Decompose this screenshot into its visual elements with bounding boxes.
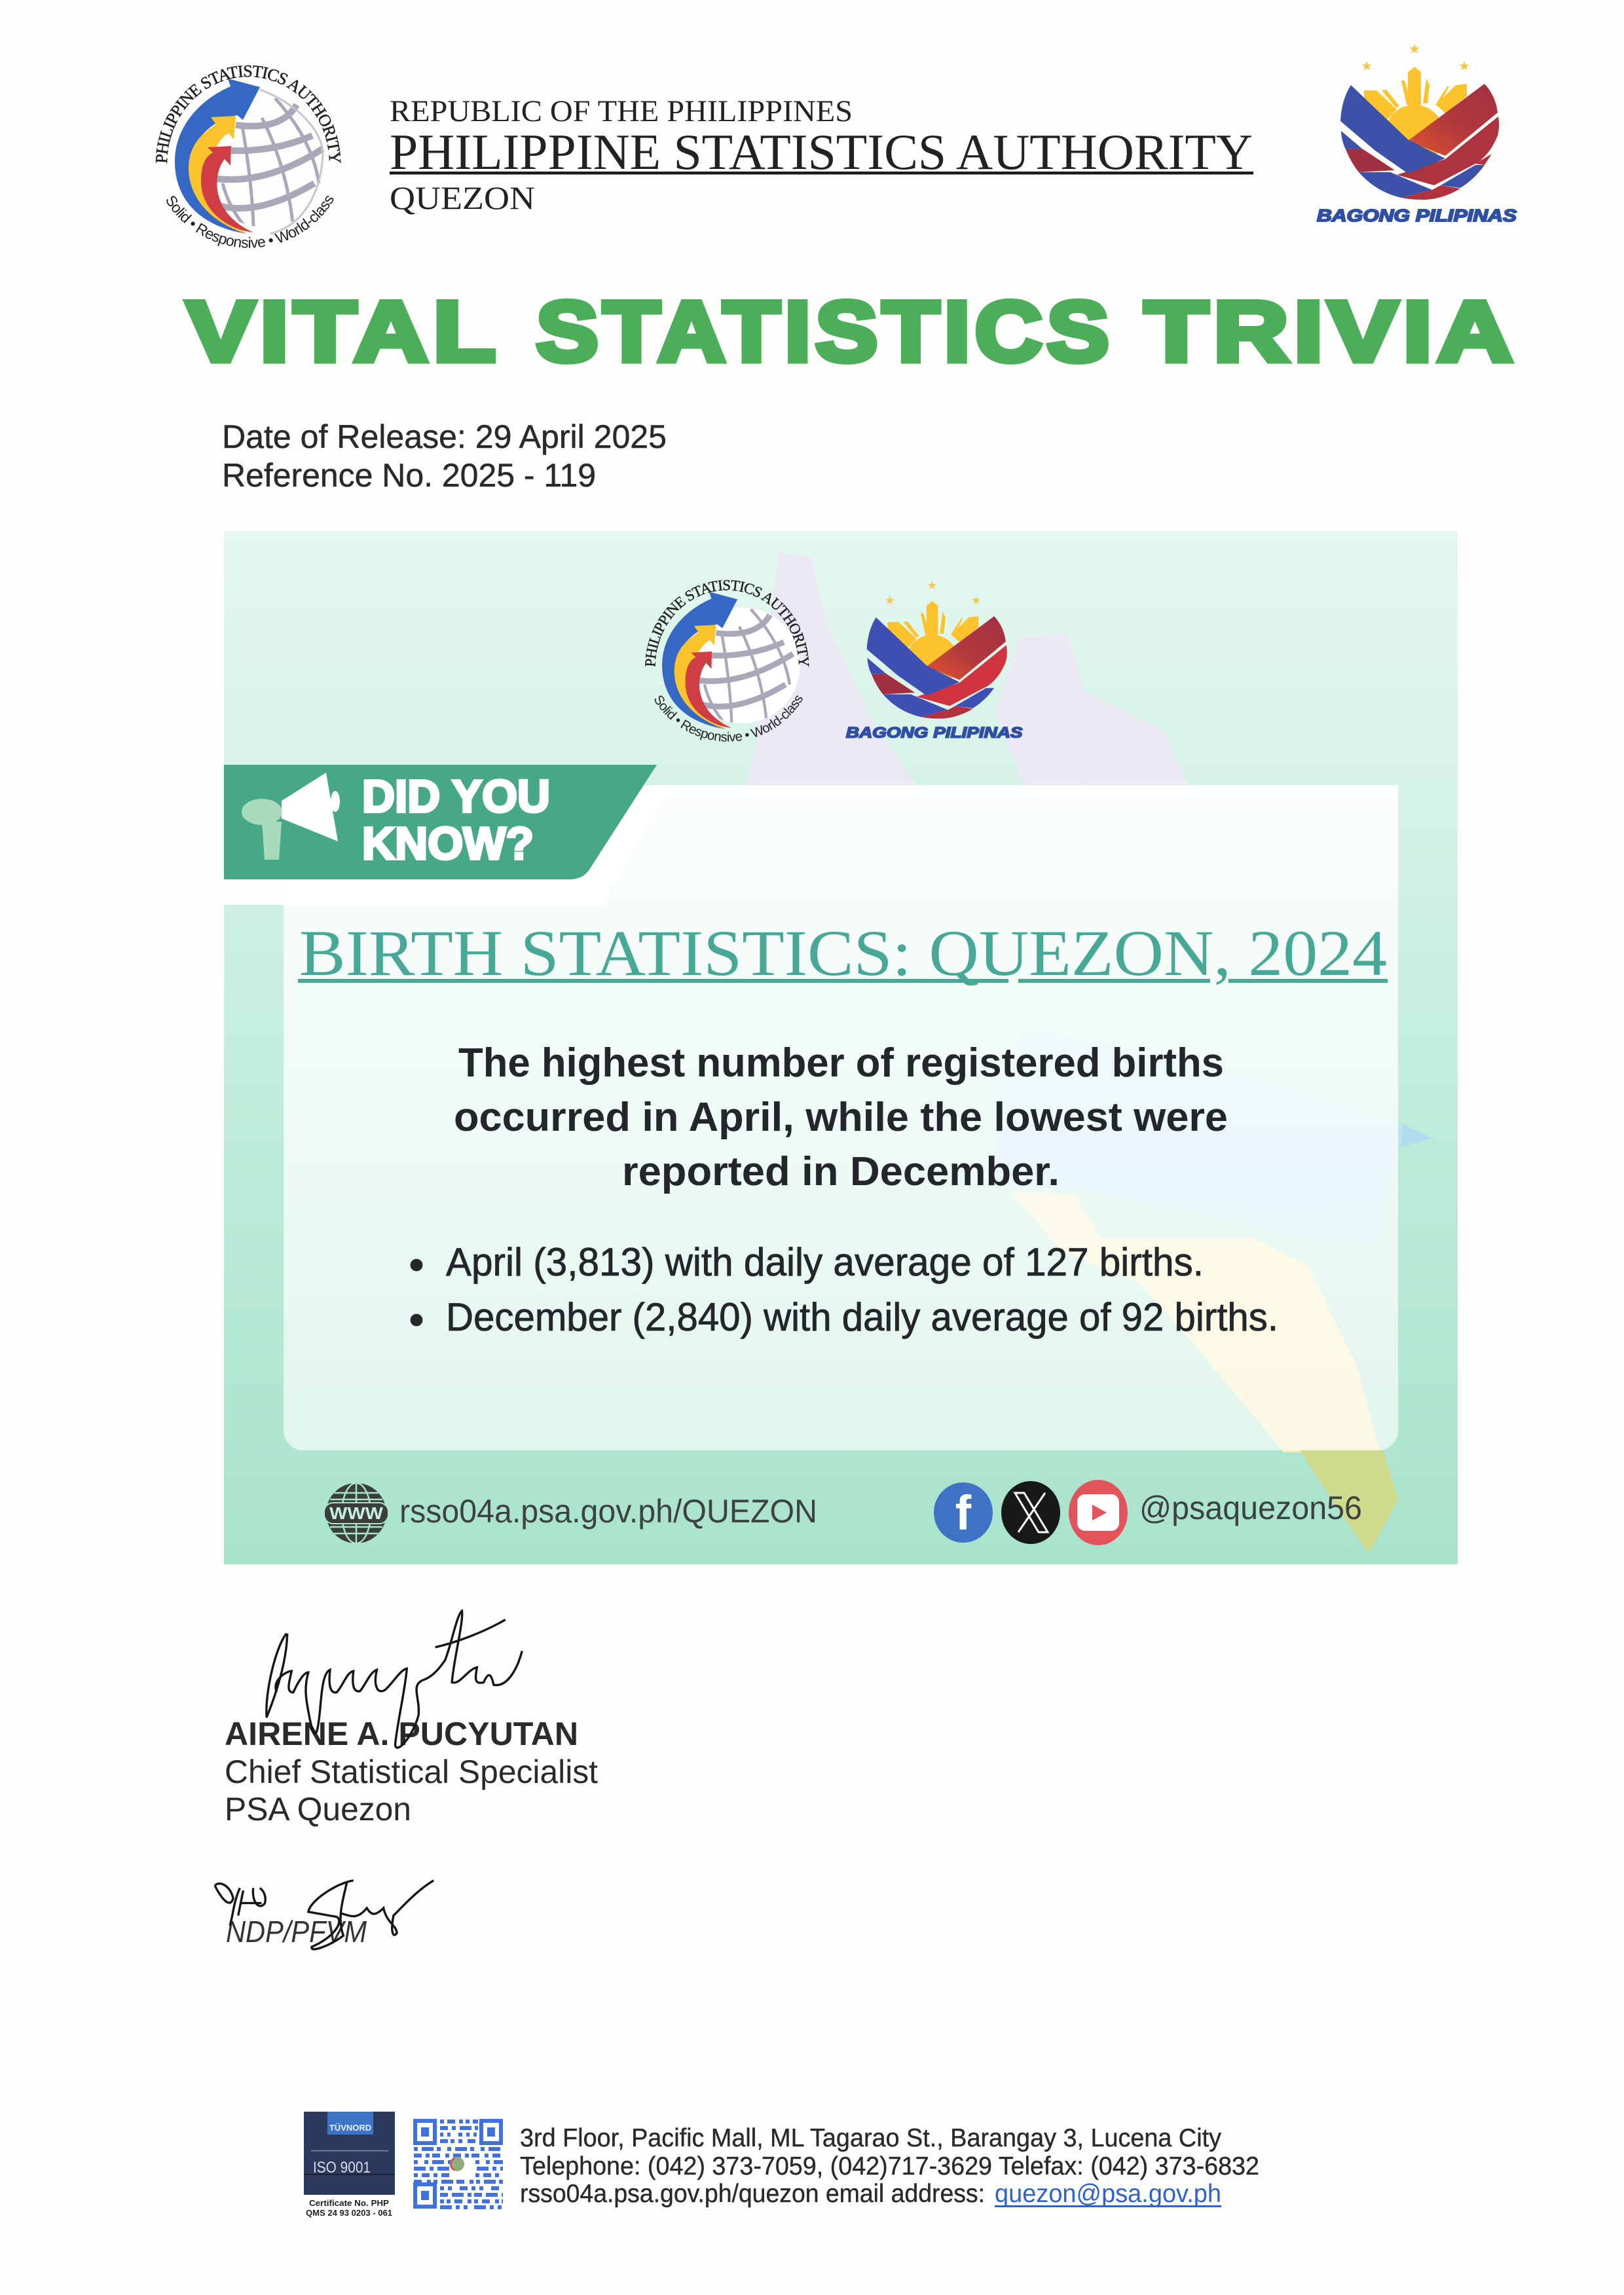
banner: did you know <box>224 765 657 879</box>
icon: facebook: f <box>955 1486 972 1540</box>
text block: key finding <box>454 1040 1228 1194</box>
badge: ISO 9001 certification <box>304 2112 395 2218</box>
icon: youtube <box>1069 1480 1128 1545</box>
website link with globe icon <box>324 1483 817 1543</box>
signatory block: AIRENE A. PUCYUTAN <box>225 1716 578 1752</box>
text block: key finding: The highest number of registered births <box>458 1040 1224 1086</box>
banner: did you know: DID YOU <box>362 771 550 822</box>
icon: www globe: WWW <box>329 1503 384 1523</box>
office contact details: quezon@psa.gov.ph <box>995 2180 1221 2208</box>
release date and reference number: Reference No. 2025 - 119 <box>222 457 596 494</box>
logo: Philippine Statistics Authority seal: Solid • Responsive • World-class <box>166 196 334 248</box>
map southern tip <box>1300 1450 1398 1553</box>
signatory block <box>225 1716 598 1827</box>
title: Vital Statistics Trivia: STATISTICS <box>536 284 1114 379</box>
title: Vital Statistics Trivia: TRIVIA <box>1145 284 1518 379</box>
QR code <box>414 2121 503 2207</box>
logo: PSA seal small: PHILIPPINE STATISTICS AUTHORITY <box>645 580 809 667</box>
initials: NDP/PFVM: NDP/PFVM <box>226 1915 367 1949</box>
bullet list: monthly figures: April (3,813) with daily average of 127 births. <box>446 1240 1204 1284</box>
website link with globe icon: rsso04a.psa.gov.ph/QUEZON <box>399 1493 817 1530</box>
signature: initials <box>215 1881 434 1949</box>
logo: Bagong Pilipinas small <box>846 581 1023 741</box>
logo: Bagong Pilipinas: BAGONG PILIPINAS <box>1317 206 1517 225</box>
office contact details <box>520 2124 1259 2208</box>
band behind banner <box>224 785 671 905</box>
icon: megaphone <box>242 773 340 860</box>
bullet list: monthly figures: December (2,840) with daily average of 92 births. <box>446 1295 1278 1339</box>
signature: chief statistical specialist <box>267 1611 522 1748</box>
office contact details: 3rd Floor, Pacific Mall, ML Tagarao St., Barangay 3, Lucena City <box>520 2124 1221 2152</box>
badge: ISO 9001 certification: TÜVNORD <box>329 2123 371 2133</box>
badge: ISO 9001 certification: Certificate No. PHP <box>309 2198 389 2208</box>
title: Vital Statistics Trivia <box>187 284 1518 379</box>
social media icons and handle: @psaquezon56 <box>1139 1490 1362 1526</box>
text block: key finding: occurred in April, while the lowest were <box>454 1095 1228 1140</box>
header text block <box>390 94 1253 216</box>
title: Vital Statistics Trivia: VITAL <box>187 284 501 379</box>
office contact details: rsso04a.psa.gov.ph/quezon email address: <box>520 2180 985 2208</box>
icon: X <box>1001 1481 1060 1544</box>
signatory block: Chief Statistical Specialist <box>225 1753 598 1790</box>
panel: did you know infographic <box>224 531 1458 1564</box>
icon: facebook <box>934 1482 993 1543</box>
office contact details: Telephone: (042) 373-7059, (042)717-3629 Telefax: (042) 373-6832 <box>520 2152 1259 2180</box>
signatory block: PSA Quezon <box>225 1791 411 1827</box>
map silhouette <box>747 552 1404 1452</box>
social media icons and handle <box>934 1480 1362 1545</box>
map tip <box>1400 1125 1432 1147</box>
logo: Bagong Pilipinas small: BAGONG PILIPINAS <box>846 724 1023 741</box>
header text block: QUEZON <box>390 179 535 216</box>
inner content card <box>284 785 1398 1450</box>
logo: Philippine Statistics Authority seal: PHILIPPINE STATISTICS AUTHORITY <box>156 65 341 164</box>
header text block: PHILIPPINE STATISTICS AUTHORITY <box>390 124 1253 180</box>
icon: www globe <box>324 1483 388 1543</box>
logo: PSA seal small: Solid • Responsive • World-class <box>655 695 803 742</box>
text block: key finding: reported in December. <box>622 1149 1060 1194</box>
bullet list: monthly figures <box>411 1240 1278 1339</box>
logo: PSA seal small <box>645 580 809 742</box>
logo: Bagong Pilipinas <box>1317 44 1517 225</box>
heading: birth statistics: BIRTH STATISTICS: QUEZON, 2024 <box>299 917 1387 989</box>
badge: ISO 9001 certification: QMS 24 93 0203 - 061 <box>306 2208 392 2218</box>
banner: did you know: KNOW? <box>362 818 534 869</box>
badge: ISO 9001 certification: ISO 9001 <box>313 2159 371 2176</box>
logo: Philippine Statistics Authority seal <box>156 65 341 248</box>
release date and reference number <box>222 418 667 494</box>
header text block: REPUBLIC OF THE PHILIPPINES <box>390 94 853 128</box>
release date and reference number: Date of Release: 29 April 2025 <box>222 418 667 455</box>
